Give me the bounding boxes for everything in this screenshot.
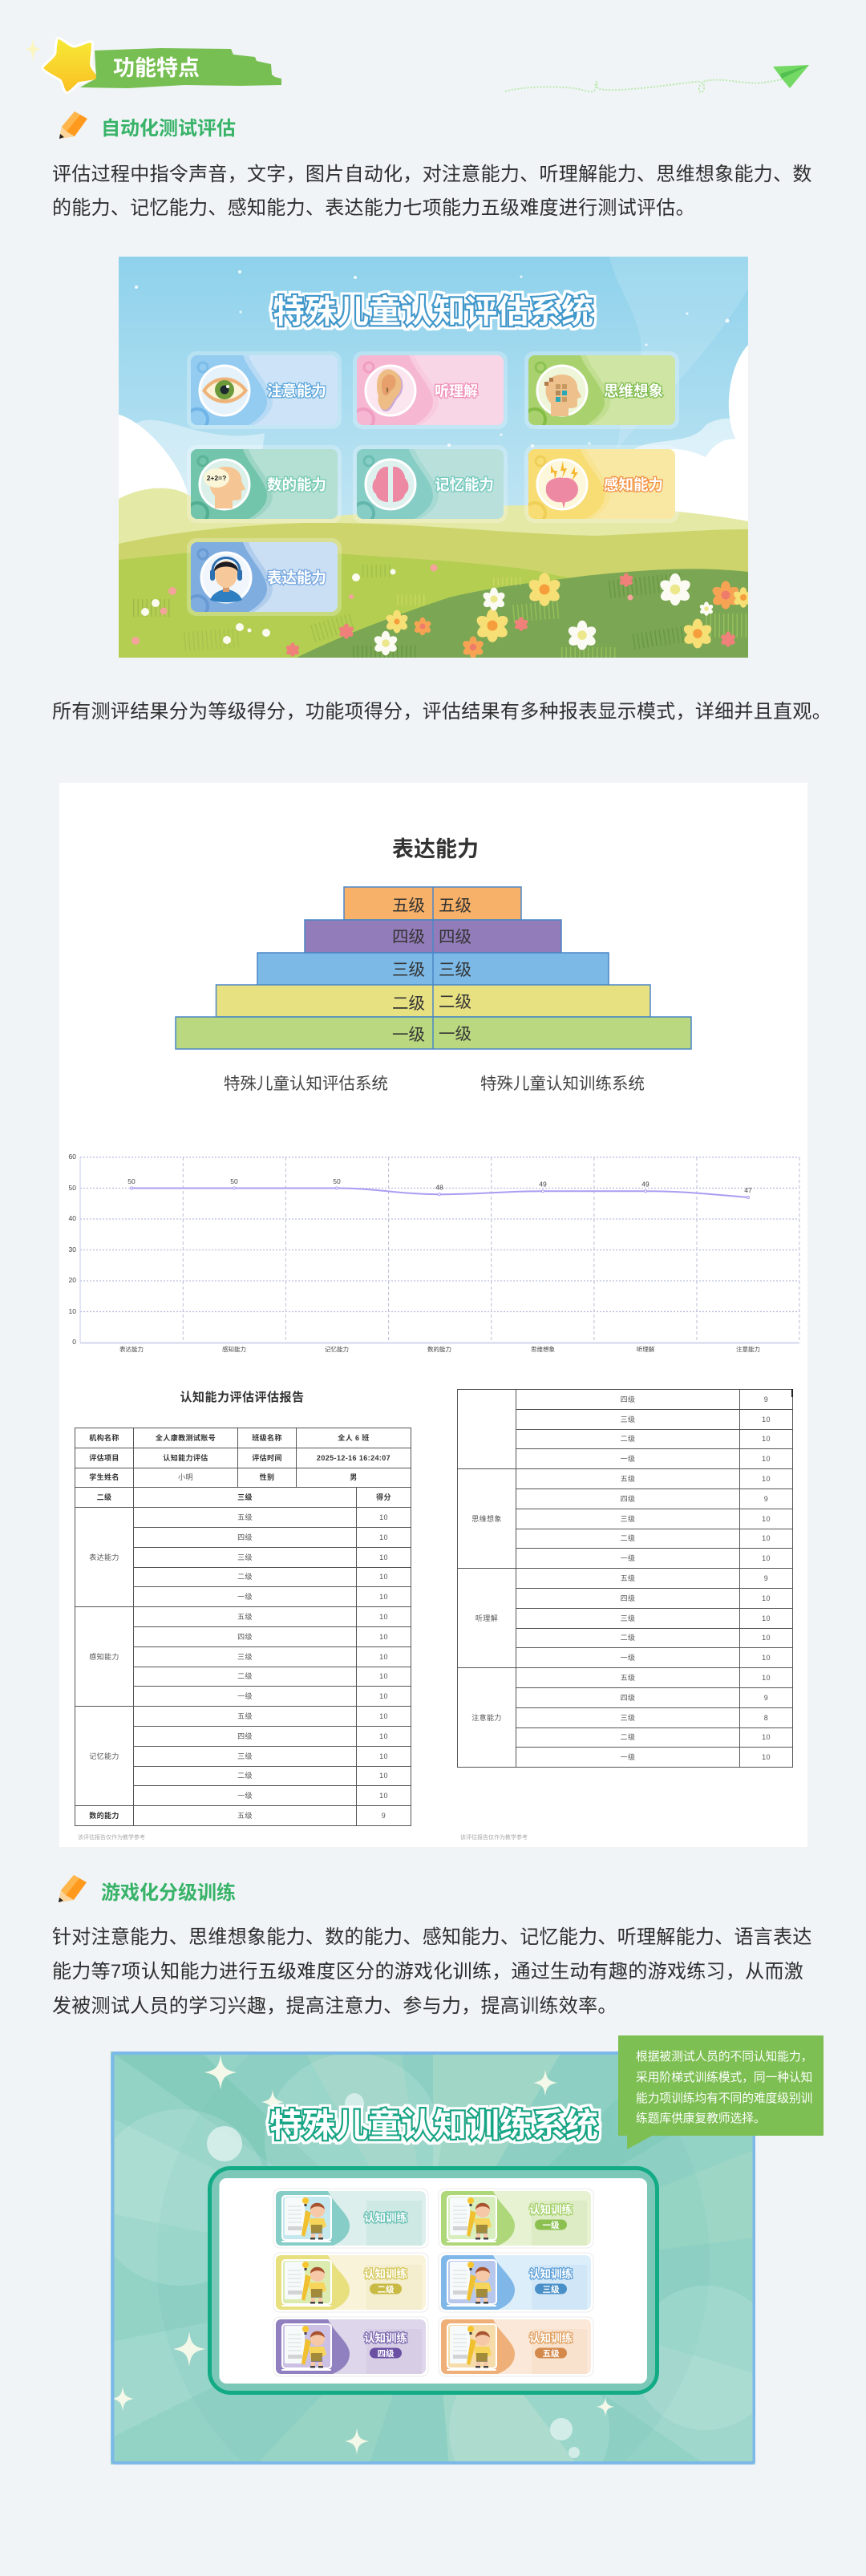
table: report page 1: 二级 (237, 1573, 253, 1581)
callout: stepped training note: 采用阶梯式训练模式，同一种认知 (636, 2071, 812, 2084)
table: report page 1: 10 (379, 1593, 388, 1601)
clouds (119, 345, 748, 529)
chart: score line: 感知能力 (222, 1345, 246, 1353)
card: training level one: 一级 (542, 2220, 560, 2230)
chart: score line: 60 (69, 1152, 76, 1160)
table: report page 1: 10 (379, 1792, 388, 1800)
table: report page 1: 四级 (237, 1633, 253, 1641)
table: report page 1: 二级 (237, 1672, 253, 1680)
table: report page 1: 男 (350, 1473, 358, 1481)
chart: level pyramid: 二级 (392, 994, 425, 1013)
table: report page 1: 10 (379, 1653, 388, 1661)
table: report page 2: 10 (762, 1594, 771, 1602)
card: training level five: 认知训练 (529, 2331, 573, 2344)
table: report page 1: 一级 (237, 1593, 253, 1601)
panel: training system screenshot (111, 2051, 755, 2465)
table: report page 1: 10 (379, 1553, 388, 1561)
table: report page 2: 四级 (621, 1395, 635, 1403)
text block: training paragraph: 发被测试人员的学习兴趣，提高注意力、参与力，提高训练效率。 (52, 1995, 617, 2017)
table: report page 1: 二级 (97, 1493, 111, 1501)
chart: score line: 50 (127, 1177, 136, 1185)
footnote: page 2: 该评估报告仅作为教学参考 (460, 1835, 528, 1841)
callout: stepped training note (618, 2035, 824, 2149)
table: report page 2: 四级 (621, 1694, 635, 1702)
table: report page 1: 性别 (260, 1473, 274, 1481)
chart: score line: 记忆能力 (325, 1345, 349, 1353)
table: report page 1: 四级 (237, 1533, 253, 1541)
table: report page 1: 感知能力 (89, 1653, 119, 1661)
table: report page 2: 10 (762, 1435, 771, 1443)
table: report page 1: 学生姓名 (89, 1473, 119, 1481)
banner title: 功能特点 (113, 56, 200, 80)
chart: score line: 50 (333, 1177, 341, 1185)
table: report page 1: 10 (379, 1772, 388, 1780)
system title: 特殊儿童认知评估系统 (273, 294, 593, 330)
table: report page 1: 小明 (178, 1473, 193, 1481)
icon: sparkle (25, 38, 42, 62)
icon: head with pixels (544, 375, 581, 416)
table: report page 2: 二级 (621, 1634, 635, 1642)
table: report page 2: 9 (764, 1395, 768, 1403)
table: report page 1: 得分 (376, 1493, 391, 1501)
table: report page 2: 10 (762, 1455, 771, 1463)
table: report page 2: 10 (762, 1654, 771, 1662)
card: perception: 感知能力 (604, 476, 663, 493)
card: numbers (187, 445, 342, 524)
chart: level pyramid (175, 886, 692, 1050)
table: report page 2: 四级 (621, 1594, 635, 1602)
table: report page 2: 三级 (621, 1614, 635, 1622)
card: training level two: 二级 (377, 2284, 395, 2295)
chart: score line: 20 (69, 1276, 76, 1284)
table: report page 2: 10 (762, 1634, 771, 1642)
card: memory (353, 445, 508, 524)
table: report page 1: 三级 (237, 1653, 253, 1661)
text block: training paragraph (52, 1926, 812, 2017)
card: training level three: 三级 (542, 2284, 560, 2295)
table: report page 1: 10 (379, 1732, 388, 1740)
table: report page 1: 三级 (237, 1493, 253, 1501)
chart heading: 表达能力 (392, 837, 479, 861)
table: report page 2: 五级 (621, 1674, 635, 1682)
table: report page 1: 机构名称 (89, 1434, 119, 1442)
table: report page 2: 一级 (621, 1654, 635, 1662)
card: training level two: 认知训练 (364, 2267, 407, 2280)
table: report page 1: 评估项目 (89, 1454, 119, 1462)
card: training level three (439, 2253, 593, 2312)
chart: score line: 50 (69, 1184, 76, 1192)
table: report page 1 (75, 1428, 411, 1826)
table: report page 1: 10 (379, 1633, 388, 1641)
table: report page 2: 10 (762, 1753, 771, 1761)
hills (119, 488, 748, 658)
table: report page 1: 10 (379, 1573, 388, 1581)
chart: score line: 思维想象 (531, 1345, 555, 1353)
star shape (42, 38, 99, 93)
table: report page 1: 一级 (237, 1792, 253, 1800)
table: report page 1: 五级 (237, 1613, 253, 1621)
card: attention: 注意能力 (267, 383, 326, 399)
card: training level four (273, 2317, 428, 2376)
table: report page 2: 10 (762, 1416, 771, 1424)
icon: person with headphones (210, 558, 242, 602)
card: imagination: 思维想象 (604, 383, 663, 399)
card: training level three: 认知训练 (529, 2267, 573, 2280)
table: report page 1: 10 (379, 1692, 388, 1700)
card: training level one (439, 2189, 593, 2248)
card: training level two (273, 2253, 428, 2312)
table: report page 1: 全人 6 班 (338, 1434, 370, 1442)
icon: brain with lightning (546, 461, 578, 508)
text block: training paragraph: 针对注意能力、思维想象能力、数的能力、感知能力、记忆能力、听理解能力、语言表达 (52, 1926, 812, 1948)
chart: level pyramid: 五级 (439, 897, 471, 915)
icon: head with sum (204, 467, 245, 508)
table: report page 1: 二级 (237, 1772, 253, 1780)
caption: training system: 特殊儿童认知训练系统 (480, 1075, 645, 1093)
chart: score line: 49 (539, 1181, 547, 1189)
chart: score line (69, 1152, 800, 1353)
table: report page 2: 三级 (621, 1714, 635, 1722)
table: report page 1: 10 (379, 1672, 388, 1680)
card: listening: 听理解 (435, 383, 478, 399)
card: imagination (524, 351, 679, 430)
panel: assessment system screenshot (119, 257, 748, 658)
table: report page 2: 一级 (621, 1455, 635, 1463)
section banner (80, 48, 281, 88)
table: report page 2: 一级 (621, 1753, 635, 1761)
card: training level four: 四级 (377, 2348, 395, 2359)
table: report page 1: 五级 (237, 1712, 253, 1720)
chart: score line: 听理解 (637, 1345, 655, 1353)
training title: 特殊儿童认知训练系统 (269, 2107, 598, 2144)
table: report page 1: 数的能力 (89, 1812, 119, 1820)
icon: eye (202, 377, 248, 403)
table: report page 2 (457, 1389, 793, 1768)
dotted trail (505, 79, 784, 92)
table: report page 1: 记忆能力 (89, 1752, 119, 1760)
brush stroke (80, 48, 281, 88)
table: report page 2: 二级 (621, 1534, 635, 1542)
icon: head with sum: 2+2=? (207, 474, 226, 482)
chart: score line: 表达能力 (119, 1345, 144, 1353)
table: report page 2: 8 (764, 1714, 768, 1722)
plane (773, 65, 809, 88)
table: report page 2: 10 (762, 1614, 771, 1622)
table: report page 1: 三级 (237, 1752, 253, 1760)
card: training level four: 认知训练 (364, 2331, 407, 2344)
card: training level one: 认知训练 (529, 2203, 573, 2216)
table: report page 1: 班级名称 (252, 1434, 282, 1442)
text block: result description: 所有测评结果分为等级得分，功能项得分，评估结果有多种报表显示模式，详细并且直观。 (52, 701, 832, 723)
chart: score line: 注意能力 (736, 1345, 760, 1353)
chart: score line: 10 (69, 1307, 76, 1315)
table: report page 2: 10 (762, 1515, 771, 1523)
table: report page 1: 一级 (237, 1692, 253, 1700)
table: report page 1: 四级 (237, 1732, 253, 1740)
icon: pencil 1 (59, 111, 87, 139)
table: report page 2: 10 (762, 1733, 771, 1741)
card: training base: 认知训练 (364, 2211, 407, 2224)
table: report page 2: 一级 (621, 1554, 635, 1562)
panel: report sheet (59, 783, 807, 1847)
table: report page 1: 10 (379, 1533, 388, 1541)
chart: level pyramid: 五级 (392, 897, 425, 915)
chart: level pyramid: 二级 (439, 993, 471, 1011)
table: report page 1: 五级 (237, 1513, 253, 1521)
report title: 认知能力评估评估报告 (180, 1391, 305, 1404)
heading: automated testing: 自动化测试评估 (101, 118, 236, 140)
callout: stepped training note: 练题库供康复教师选择。 (636, 2111, 766, 2125)
flowers (132, 565, 755, 658)
card: attention (187, 351, 342, 430)
callout: stepped training note: 根据被测试人员的不同认知能力， (636, 2050, 812, 2064)
callout: stepped training note: 能力项训练均有不同的难度级别训 (636, 2092, 812, 2105)
table: report page 1: 全人康教测试账号 (156, 1434, 216, 1442)
card: memory: 记忆能力 (435, 476, 494, 493)
bubbles (207, 2093, 580, 2458)
card: perception (524, 445, 679, 524)
text block: intro paragraph (52, 164, 812, 219)
chart: score line: 48 (435, 1184, 443, 1192)
heading: gamified training: 游戏化分级训练 (101, 1882, 236, 1904)
chart: score line: 49 (641, 1181, 650, 1189)
caption: assessment system: 特殊儿童认知评估系统 (224, 1075, 388, 1093)
table: report page 2: 10 (762, 1554, 771, 1562)
table: report page 1: 10 (379, 1752, 388, 1760)
table: report page 1: 认知能力评估 (163, 1454, 208, 1462)
card: training level five: 五级 (542, 2348, 560, 2359)
card: training base (273, 2189, 428, 2248)
chart: level pyramid: 三级 (392, 961, 425, 979)
table: report page 2: 五级 (621, 1574, 635, 1582)
table: report page 2: 三级 (621, 1515, 635, 1523)
icon: star badge (26, 37, 96, 95)
text block: intro paragraph: 评估过程中指令声音，文字，图片自动化，对注意能力、听理解能力、思维想象能力、数 (52, 164, 812, 185)
table: report page 1: 9 (382, 1812, 386, 1820)
table: report page 2: 四级 (621, 1495, 635, 1503)
card: expression (187, 538, 342, 617)
table: report page 2: 二级 (621, 1435, 635, 1443)
table: report page 2: 10 (762, 1475, 771, 1483)
frame (210, 2169, 658, 2393)
icon: pencil 2 (59, 1875, 87, 1902)
card: training level five (439, 2317, 593, 2376)
chart: level pyramid: 三级 (439, 961, 471, 979)
chart: level pyramid: 一级 (439, 1025, 471, 1043)
sparkles (111, 2055, 614, 2454)
text block: intro paragraph: 的能力、记忆能力、感知能力、表达能力七项能力五级难度进行测试评估。 (52, 197, 695, 219)
icon: brain (372, 467, 409, 502)
table: report page 1: 五级 (237, 1812, 253, 1820)
chart: score line: 0 (72, 1338, 76, 1346)
card: expression: 表达能力 (267, 569, 326, 586)
chart: score line: 50 (230, 1177, 238, 1185)
table: report page 1: 表达能力 (89, 1553, 119, 1561)
table: report page 1: 三级 (237, 1553, 253, 1561)
chart: level pyramid: 四级 (439, 928, 471, 946)
table: report page 2: 听理解 (475, 1614, 498, 1622)
chart: level pyramid: 一级 (392, 1026, 425, 1044)
table: report page 2: 10 (762, 1674, 771, 1682)
table: report page 2: 三级 (621, 1416, 635, 1424)
table: report page 2: 五级 (621, 1475, 635, 1483)
table: report page 2: 思维想象 (471, 1515, 502, 1523)
table: report page 2: 注意能力 (471, 1714, 502, 1722)
table: report page 2: 9 (764, 1574, 768, 1582)
card: numbers: 数的能力 (267, 476, 326, 493)
grass tufts (133, 571, 748, 654)
chart: score line: 47 (744, 1186, 752, 1194)
table: report page 2: 9 (764, 1495, 768, 1503)
text block: training paragraph: 能力等7项认知能力进行五级难度区分的游戏化训练，通过生动有趣的游戏练习，从而激 (52, 1961, 803, 1983)
icon: ear (377, 369, 403, 411)
chart: score line: 40 (69, 1214, 76, 1222)
table: report page 1: 10 (379, 1513, 388, 1521)
table: report page 1: 评估时间 (252, 1454, 282, 1462)
footnote: page 1: 该评估报告仅作为教学参考 (78, 1835, 145, 1841)
table: report page 1: 2025-12-16 16:24:07 (317, 1454, 391, 1462)
table: report page 2: 10 (762, 1534, 771, 1542)
table: report page 2: 二级 (621, 1733, 635, 1741)
chart: score line: 数的能力 (427, 1345, 451, 1353)
table: report page 1: 10 (379, 1613, 388, 1621)
table: report page 2: 9 (764, 1694, 768, 1702)
chart: level pyramid: 四级 (392, 928, 425, 946)
card: listening (353, 351, 508, 430)
table: report page 1: 10 (379, 1712, 388, 1720)
chart: score line: 30 (69, 1245, 76, 1254)
paper plane with dotted trail (505, 65, 809, 93)
